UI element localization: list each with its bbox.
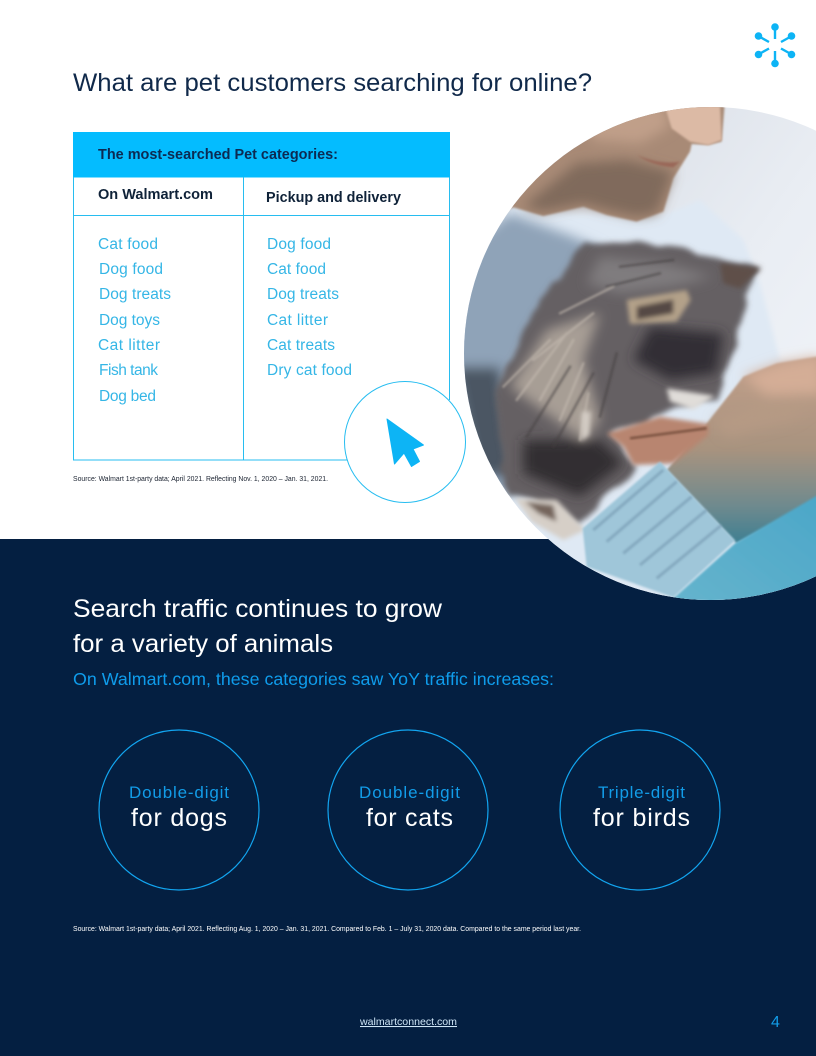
cat fur strands	[503, 260, 673, 447]
heading: search traffic	[73, 595, 443, 658]
list: Walmart.com categories: Cat litter	[98, 337, 160, 354]
heading: search traffic: Search traffic continues to grow	[73, 595, 443, 623]
cat body	[497, 240, 760, 523]
circle stat: cats: Double-digit	[359, 783, 460, 802]
lower sleeve	[673, 495, 816, 600]
source note: search traffic: Source: Walmart 1st-party data; April 2021. Reflecting Aug. 1, 2020 – Jan. 31, 2021. Compared to Feb. 1 – July 31, 2020 data. Compared to the same period last year.	[73, 926, 581, 933]
list: pickup and delivery categories: Dog treats	[267, 286, 339, 303]
face and neck	[510, 107, 726, 223]
cuff ribs	[593, 470, 722, 578]
column heading: On Walmart.com: On Walmart.com	[98, 187, 213, 203]
circle stat: birds: Triple-digit	[598, 783, 685, 802]
photo: man holding grey cat, circular crop	[464, 107, 816, 600]
list: Walmart.com categories: Dog treats	[99, 286, 171, 303]
heading: search traffic: for a variety of animals	[73, 630, 333, 658]
list: pickup and delivery categories	[267, 236, 352, 379]
circle stat: dogs	[99, 730, 259, 890]
icon: cursor in circle	[344, 382, 466, 502]
page number: 4	[771, 1014, 780, 1031]
dark lower background panel	[0, 539, 816, 1056]
logo: spark icon	[755, 23, 795, 67]
list: pickup and delivery categories: Dog food	[267, 236, 331, 253]
list: pickup and delivery categories: Cat food	[267, 261, 326, 278]
circle stat: birds: for birds	[593, 804, 690, 832]
source note: categories: Source: Walmart 1st-party data; April 2021. Reflecting Nov. 1, 2020 – Jan. 31, 2021.	[73, 476, 328, 483]
list: pickup and delivery categories: Cat treats	[267, 337, 335, 354]
fingers under cat	[607, 417, 708, 465]
circle stat: dogs: Double-digit	[129, 783, 229, 802]
table header band: The most-searched Pet categories:	[98, 147, 338, 163]
panel: most-searched pet categories table	[73, 132, 450, 460]
list: Walmart.com categories: Dog food	[99, 261, 163, 278]
list: pickup and delivery categories: Dry cat food	[267, 362, 352, 379]
sweater	[510, 209, 816, 600]
arm and hand	[667, 355, 816, 543]
title: What are pet customers searching for online?	[73, 69, 592, 97]
list: Walmart.com categories: Cat food	[98, 236, 158, 253]
circle stat: cats	[328, 730, 488, 890]
table grid lines	[73, 177, 450, 460]
cat fur shading	[510, 257, 723, 497]
sweater cuff	[583, 462, 735, 597]
cat ears	[627, 263, 760, 324]
list: Walmart.com categories: Dog toys	[99, 312, 160, 329]
footer link: walmartconnect.com	[359, 1016, 457, 1028]
list: Walmart.com categories	[98, 236, 171, 405]
list: Walmart.com categories: Dog bed	[99, 388, 156, 405]
circle stat: dogs: for dogs	[131, 804, 227, 832]
circle stat: birds	[560, 730, 720, 890]
list: pickup and delivery categories: Cat litter	[267, 312, 328, 329]
column heading: Pickup and delivery: Pickup and delivery	[266, 190, 401, 206]
circle stat: cats: for cats	[366, 804, 453, 832]
table header band	[73, 132, 450, 178]
subheading: On Walmart.com, these categories saw YoY traffic increases:	[73, 669, 554, 689]
list: Walmart.com categories: Fish tank	[99, 362, 158, 379]
